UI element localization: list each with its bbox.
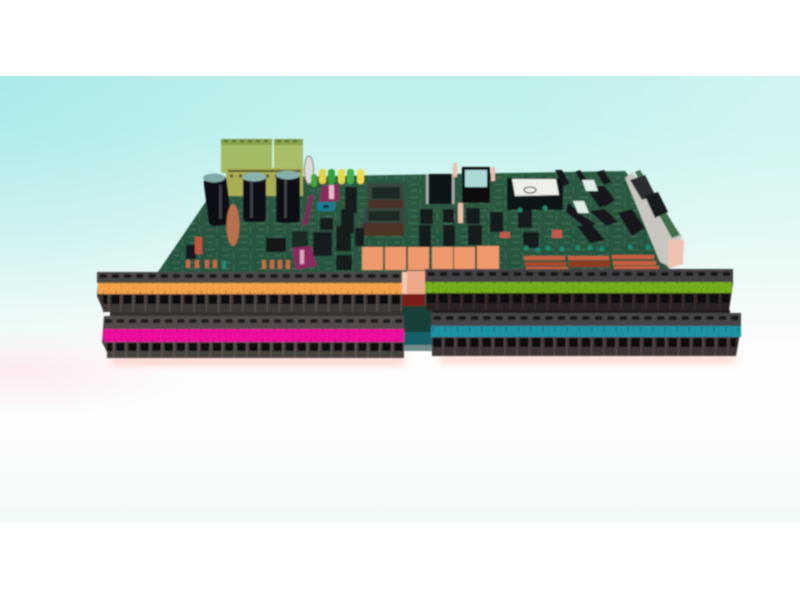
- green label strip: [425, 282, 732, 293]
- white sticker labels: [573, 180, 598, 213]
- circuit board assembly: [97, 139, 741, 358]
- red parts: small resistors: [500, 230, 562, 238]
- board centre gap: [402, 306, 432, 351]
- photo background: [0, 76, 800, 523]
- large black module with white label: [507, 178, 563, 210]
- shadow beneath terminal blocks: [112, 356, 735, 364]
- magenta and teal DIP parts: [292, 184, 339, 270]
- dark backing between terminal rows: [110, 310, 730, 316]
- right-hand ICs: [555, 170, 645, 243]
- SIMM socket: [426, 174, 455, 204]
- orange relays: [362, 246, 499, 306]
- magenta label strip: [103, 329, 404, 342]
- resistor networks: [524, 255, 659, 270]
- terminal block: orange: [97, 272, 402, 312]
- small teal bead components: [518, 206, 650, 252]
- terminal block: magenta: [102, 316, 404, 358]
- teal label strip: [431, 326, 741, 337]
- terminal block: teal: [431, 313, 741, 356]
- pink header pins: [453, 163, 495, 223]
- electrolytic capacitors: [203, 170, 300, 227]
- terminal block: green: [425, 269, 733, 310]
- board: green PCB: [158, 171, 682, 345]
- disc capacitor: [226, 204, 240, 246]
- small parts: left analog section: [186, 231, 308, 269]
- square chips: flash memories: [362, 183, 404, 236]
- module with label: [462, 167, 490, 203]
- riser card on right edge: [625, 170, 684, 268]
- silver component behind capacitors: [304, 156, 314, 184]
- orange label strip: [98, 283, 402, 294]
- logic ICs: centre: [313, 187, 539, 270]
- power connectors: green terminals: [221, 139, 303, 196]
- LED row: [311, 169, 364, 187]
